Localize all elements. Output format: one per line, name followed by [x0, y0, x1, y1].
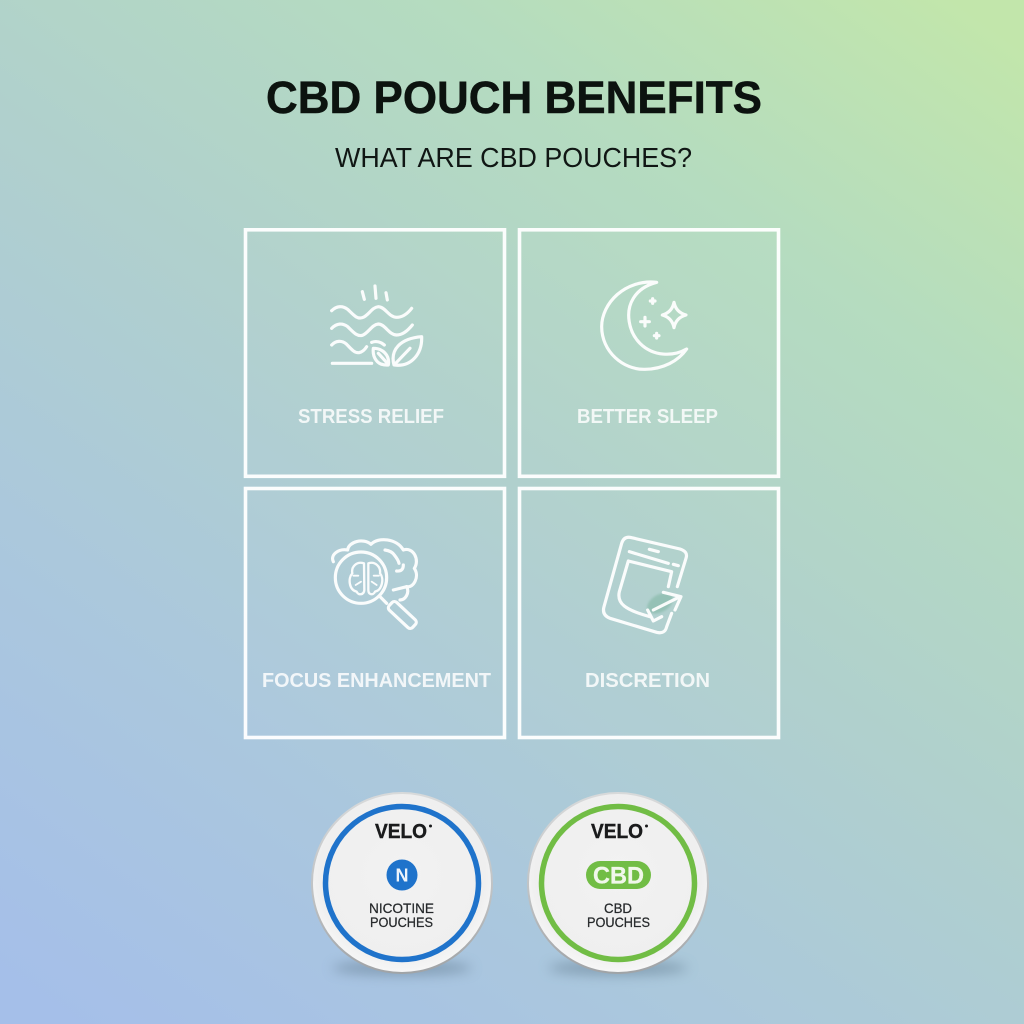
panel: better sleep [520, 230, 778, 476]
icon: brain under magnifying glass [333, 540, 418, 630]
badge: N: N [396, 866, 408, 886]
panel: focus enhancement [246, 488, 504, 738]
text: nicotine pouches [369, 900, 434, 930]
title: CBD POUCH BENEFITS [266, 72, 762, 123]
icon: crescent moon and stars [602, 282, 687, 369]
text: CBD pouches: CBD [604, 900, 632, 916]
tin: CBD pouches [527, 792, 709, 975]
text: nicotine pouches: POUCHES [370, 914, 433, 930]
badge: N [386, 860, 418, 890]
label: stress relief: STRESS RELIEF [298, 405, 444, 428]
tin: nicotine pouches [311, 792, 493, 975]
label: focus enhancement: FOCUS ENHANCEMENT [262, 669, 491, 692]
panel: stress relief [246, 230, 504, 476]
badge: CBD pill: CBD [593, 862, 644, 890]
text: nicotine pouches: NICOTINE [369, 900, 434, 916]
text: CBD pouches: POUCHES [587, 914, 650, 930]
brand: VELO: VELO [591, 821, 643, 843]
icon: pouch with arrow [603, 537, 687, 633]
subtitle: WHAT ARE CBD POUCHES? [335, 142, 692, 173]
blue ring [326, 806, 478, 960]
icon: waves and leaves [332, 286, 422, 365]
brand: VELO: VELO [375, 821, 427, 843]
label: discretion: DISCRETION [585, 669, 710, 692]
text: CBD pouches [587, 900, 650, 930]
panel: discretion [520, 488, 778, 738]
green ring [542, 806, 694, 960]
label: better sleep: BETTER SLEEP [577, 405, 718, 428]
